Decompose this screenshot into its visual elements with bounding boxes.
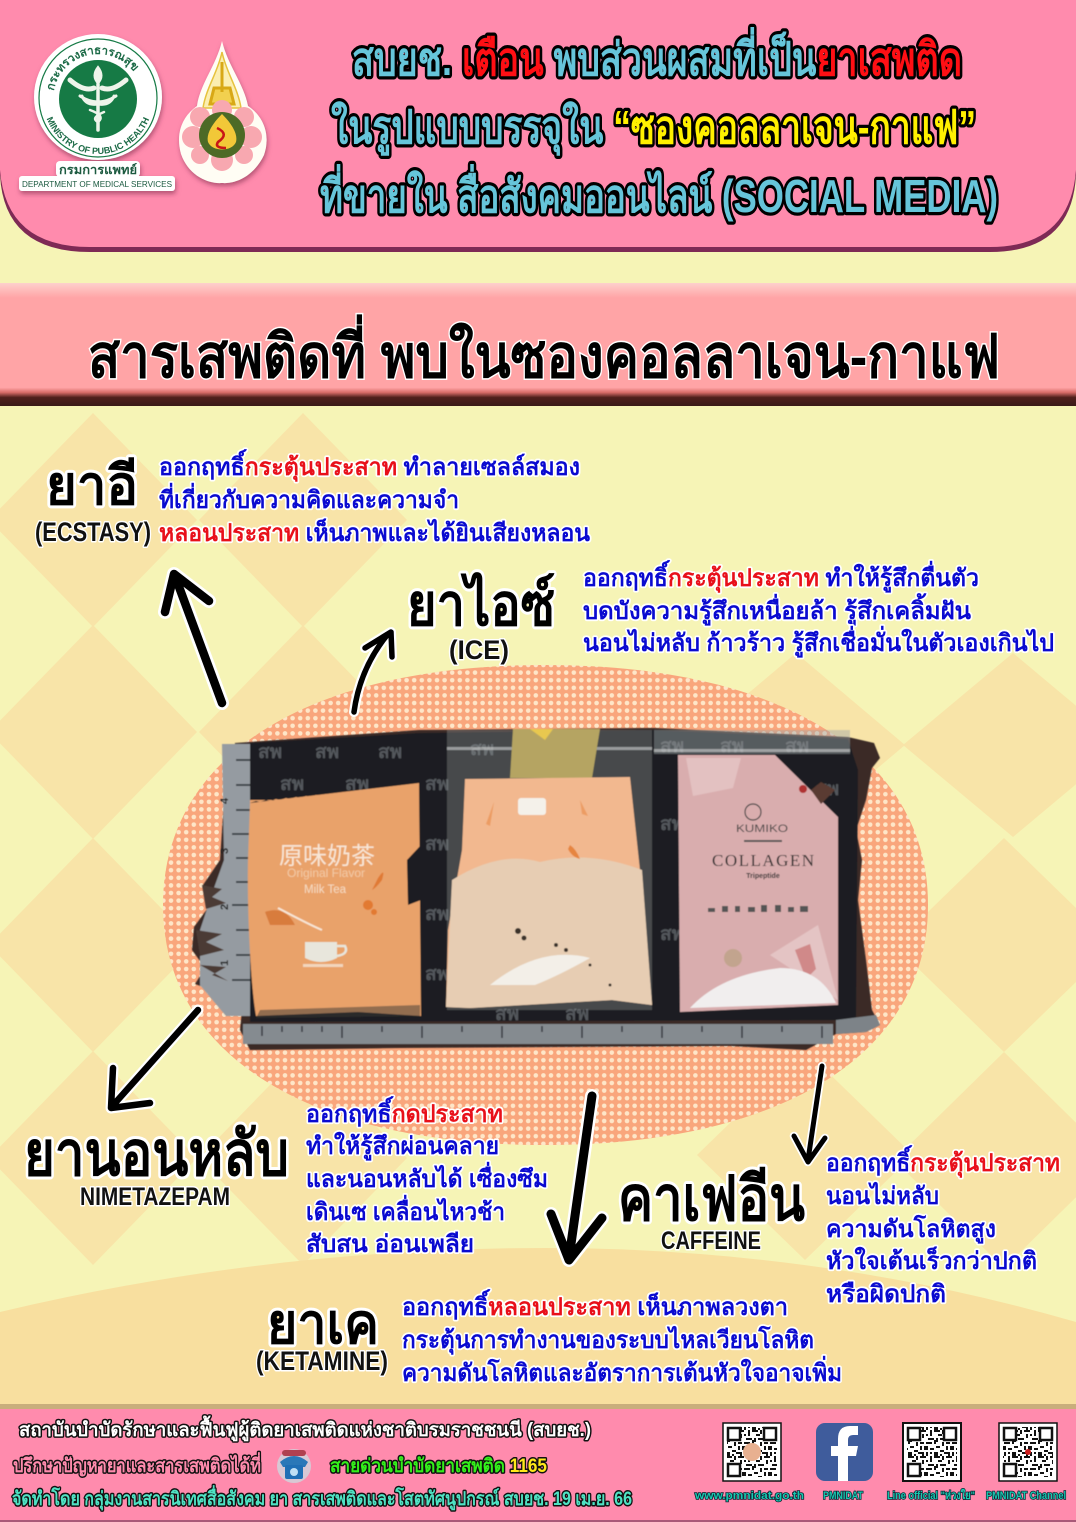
text: Nimetazepam effects: เดินเซ เคลื่อนไหวช้า (306, 1194, 505, 1226)
golden spire (203, 52, 241, 108)
text: Ecstasy effects: ที่เกี่ยวกับความคิดและความจำ (159, 482, 459, 514)
QR code: Line official (903, 1423, 961, 1481)
logo: Ministry of Public Health (17, 34, 179, 197)
text: Ketamine effects: กระตุ้นการทำงานของระบบไหลเวียนโลหิต (402, 1325, 814, 1356)
watermarks: สพ (258, 742, 282, 763)
lotus petals (182, 100, 262, 171)
watermarks: สพ (315, 742, 339, 763)
caduceus symbol (70, 66, 126, 130)
sachet: milk tea: Original Flavor (287, 866, 365, 880)
department labels (56, 161, 140, 177)
arrow: to Ketamine (551, 1096, 602, 1260)
text: Caffeine effects: ความดันโลหิตสูง (826, 1214, 996, 1244)
text: Ketamine effects (402, 1289, 842, 1387)
footer: credit line: จัดทำโดย กลุ่มงานสารนิเทศสื่อสังคม ยา สารเสพติดและโสตทัศนูปกรณ์ สบยช. 19 เม.ย. 66 (12, 1485, 632, 1511)
watermarks: สพ (470, 739, 494, 760)
label: Ice (407, 572, 555, 665)
arrow: to Nimetazepam (111, 1010, 198, 1108)
QR captions: www.pmnidat.go.th (694, 1490, 804, 1502)
photo: three sachets: 2 (219, 904, 231, 910)
text: Ketamine effects: ออกฤทธิ์หลอนประสาท เห็นภาพลวงตา (402, 1289, 788, 1321)
text: Nimetazepam effects: ออกฤทธิ์กดประสาท (306, 1096, 503, 1128)
text: Ecstasy effects: หลอนประสาท เห็นภาพและได้ยินเสียงหลอน (159, 518, 591, 547)
title: header line 2: ในรูปแบบบรรจุใน “ซองคอลลาเจน-กาแฟ” (331, 100, 976, 156)
watermarks (258, 736, 839, 1025)
label: Ketamine: (KETAMINE) (256, 1346, 388, 1376)
label: Ecstasy: (ECSTASY) (35, 517, 151, 547)
text: Ice effects: บดบังความรู้สึกเหนื่อยล้า รู้สึกเคลิ้มฝัน (583, 592, 972, 626)
QR code: YouTube channel (999, 1423, 1057, 1481)
arrow: to Ice (354, 632, 392, 712)
dotted ellipse backdrop (163, 665, 928, 1145)
text: Ice effects: นอนไม่หลับ ก้าวร้าว รู้สึกเชื่อมั่นในตัวเองเกินไป (583, 625, 1054, 658)
clear bag windows (447, 730, 652, 1010)
section heading band (0, 283, 1076, 406)
sachet: pink collagen: Tripeptide (746, 873, 780, 880)
text: Nimetazepam effects: ทำให้รู้สึกผ่อนคลาย (306, 1131, 499, 1161)
logo: Ministry of Public Health: MINISTRY OF PUBLIC HEALTH (46, 116, 150, 154)
text: Ice effects: ออกฤทธิ์กระตุ้นประสาท ทำให้รู้สึกตื่นตัว (583, 560, 979, 594)
label: Ecstasy: ยาอี (46, 456, 138, 516)
watermarks: สพ (565, 1004, 589, 1025)
sachet: pink collagen: KUMIKO (736, 823, 789, 835)
sachet: milk tea: 原味奶茶 (279, 836, 375, 871)
watermarks: สพ (378, 742, 402, 763)
text: Caffeine effects: ออกฤทธิ์กระตุ้นประสาท (826, 1145, 1060, 1179)
text: Nimetazepam effects: สับสน อ่อนเพลีย (306, 1231, 474, 1258)
text: Nimetazepam effects: และนอนหลับได้ เซื่องซึม (306, 1161, 548, 1193)
text: Nimetazepam effects (306, 1096, 548, 1258)
arrow: to Ecstasy (165, 574, 222, 703)
watermarks: สพ (660, 814, 684, 835)
QR code: website (723, 1423, 781, 1481)
text: Ecstasy effects (159, 449, 591, 547)
sachet: clear bag with powder (446, 729, 652, 1008)
photo: three sachets: 1 (219, 960, 231, 966)
watermarks: สพ (720, 736, 744, 757)
sachet: milk tea: Milk Tea (304, 884, 347, 896)
watermarks: สพ (660, 924, 684, 945)
footer: consultation line: ปรึกษาปัญหายาและสารเสพติดได้ที่ (13, 1452, 261, 1477)
label: Ice: ยาไอซ์ (407, 572, 555, 638)
QR captions: PMNIDAT (823, 1490, 863, 1502)
sachet: milk tea (248, 783, 421, 1018)
text: Caffeine effects (826, 1145, 1060, 1308)
label: Caffeine: CAFFEINE (661, 1227, 761, 1255)
header banner (0, 0, 1076, 252)
text: Ketamine effects: ความดันโลหิตและอัตราการเต้นหัวใจอาจเพิ่ม (402, 1355, 842, 1387)
text: Caffeine effects: หัวใจเต้นเร็วกว่าปกติ (826, 1246, 1037, 1275)
sachet: pink collagen: COLLAGEN (712, 851, 814, 870)
photo: three sachets: 3 (219, 848, 231, 854)
logo: institute emblem (179, 41, 267, 183)
label: Nimetazepam: NIMETAZEPAM (80, 1183, 230, 1211)
watermarks: สพ (425, 774, 449, 795)
footer: hotline: สายด่วนบำบัดยาเสพติด 1165 (330, 1456, 547, 1477)
text: Ice effects (583, 560, 1054, 658)
photo: three sachets (192, 728, 880, 1050)
label: Caffeine (618, 1165, 805, 1255)
label: Nimetazepam (24, 1120, 289, 1211)
sachet: pink collagen (678, 755, 838, 1012)
watermarks: สพ (660, 736, 684, 757)
watermarks: สพ (425, 834, 449, 855)
footer band (0, 1404, 1076, 1522)
watermarks: สพ (425, 904, 449, 925)
arrow: to Caffeine (794, 1066, 825, 1162)
watermarks: สพ (495, 1004, 519, 1025)
title: header line 1: สบยช. เตือน พบส่วนผสมที่เป็นยาเสพติด (352, 27, 962, 85)
ruler bottom (243, 1024, 833, 1044)
watermarks: สพ (425, 964, 449, 985)
text: Ecstasy effects: ออกฤทธิ์กระตุ้นประสาท ทำลายเซลล์สมอง (159, 449, 580, 483)
watermarks: สพ (815, 779, 839, 800)
label: Ketamine: ยาเค (267, 1292, 379, 1355)
footer: institute name: สถาบันบำบัดรักษาและฟื้นฟูผู้ติดยาเสพติดแห่งชาติบรมราชชนนี (สบยช.) (19, 1415, 591, 1442)
watermarks: สพ (345, 774, 369, 795)
photo cut-out base (192, 728, 880, 1050)
circular text: กระทรวงสาธารณสุข (48, 47, 138, 90)
icon: telephone badge (277, 1449, 311, 1483)
label: Nimetazepam: ยานอนหลับ (24, 1120, 289, 1189)
QR captions (694, 1488, 1066, 1502)
logo: Ministry of Public Health: กรมการแพทย์ (59, 163, 137, 177)
label: Caffeine: คาเฟอีน (618, 1165, 805, 1234)
label: Ketamine (256, 1292, 388, 1376)
watermarks: สพ (280, 774, 304, 795)
QR captions: Line official "ห่วงใย" (887, 1488, 975, 1502)
watermarks: สพ (785, 736, 809, 757)
diamond background pattern (0, 413, 1076, 1268)
ruler left (200, 744, 250, 1016)
label: Ecstasy (35, 456, 151, 547)
text: Caffeine effects: นอนไม่หลับ (826, 1181, 939, 1210)
text: Caffeine effects: หรือผิดปกติ (826, 1281, 946, 1308)
bottom hill (0, 1248, 1076, 1410)
icon: Facebook (816, 1423, 873, 1481)
logo: Ministry of Public Health: DEPARTMENT OF MEDICAL SERVICES (22, 179, 172, 189)
label: Ice: (ICE) (449, 635, 509, 665)
photo: three sachets: 4 (219, 797, 231, 804)
